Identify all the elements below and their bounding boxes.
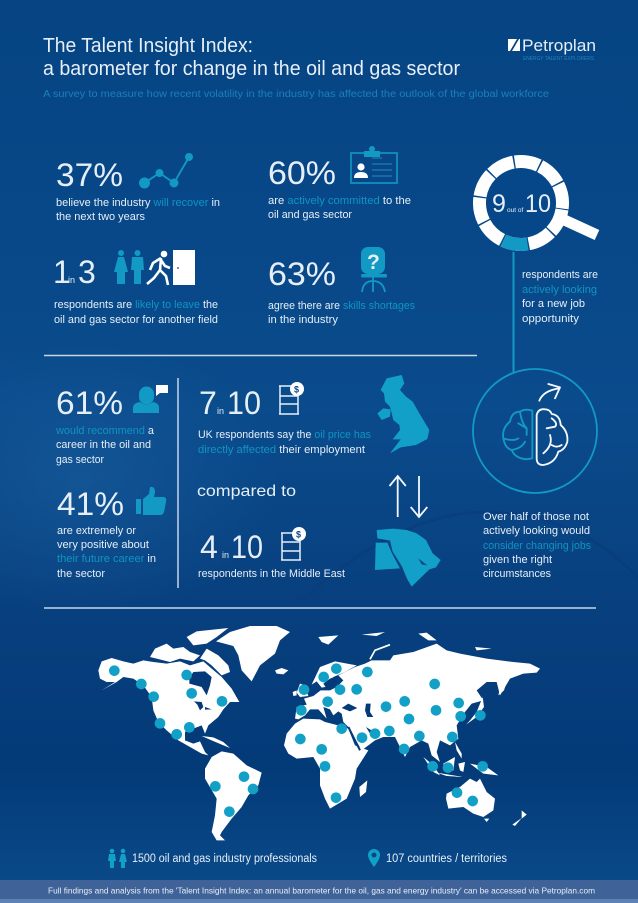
stat: 41% positive: the sector <box>57 568 105 580</box>
connector line <box>512 252 514 372</box>
icon: map pin <box>368 849 380 867</box>
world map <box>98 626 540 840</box>
stat: 37% recover: 37% <box>56 157 123 193</box>
text: consider changing jobs: Over half of those not <box>483 511 589 523</box>
text: actively looking: actively looking <box>522 284 597 296</box>
stat: 4 in 10 Middle East: 10 <box>231 529 263 565</box>
text: consider changing jobs: circumstances <box>483 568 551 580</box>
text: professionals: 1500 oil and gas industry professionals <box>132 853 317 865</box>
icon: brain <box>503 384 567 465</box>
Americas and Greenland <box>98 626 290 840</box>
stat: 4 in 10 Middle East: respondents in the Middle East <box>198 568 345 580</box>
icon: people <box>108 849 127 868</box>
footer band <box>0 880 638 903</box>
stat: 4 in 10 Middle East: in <box>222 550 229 560</box>
logo: Petroplan <box>508 37 596 62</box>
stat: 1 in 3 <box>53 254 218 326</box>
icon: people leaving through door <box>114 250 195 285</box>
stat: 7 in 10 UK: 10 <box>227 385 261 421</box>
location dots <box>109 663 488 817</box>
icon: oil barrel with dollar: $ <box>294 384 299 394</box>
stat: 37% recover: the next two years <box>56 211 145 223</box>
stat: 1 in 3: 3 <box>78 254 96 290</box>
icon: line chart <box>140 154 192 188</box>
stat: 60% committed <box>268 155 411 221</box>
icon: magnifier 9 out of 10: 9 <box>492 190 506 218</box>
stat: 41% positive: 41% <box>57 486 124 522</box>
compared to: compared to <box>197 483 296 500</box>
stat: 4 in 10 Middle East: 4 <box>200 529 218 565</box>
stat: 60% committed: 60% <box>268 155 336 191</box>
stat: 63% skills shortages: in the industry <box>268 314 339 326</box>
footer band: Full findings and analysis from the 'Talent Insight Index: an annual barometer for the oil, gas and energy industry' can be accessed via Petroplan.com <box>48 886 595 896</box>
stat: 63% skills shortages: 63% <box>268 256 336 292</box>
stat: 60% committed: oil and gas sector <box>268 209 352 221</box>
logo: Petroplan: Petroplan <box>522 37 596 55</box>
stat: 41% positive <box>57 486 156 580</box>
stat: 37% recover: believe the industry will recover in <box>56 197 220 209</box>
stat: 7 in 10 UK: in <box>217 406 224 416</box>
map: Middle East <box>375 529 441 587</box>
stat: 41% positive: are extremely or <box>57 525 136 537</box>
text: countries: 107 countries / territories <box>386 853 507 865</box>
stat: 4 in 10 Middle East <box>198 529 345 580</box>
icon: oil barrel with dollar <box>279 382 304 414</box>
stat: 1 in 3: oil and gas sector for another field <box>54 314 218 326</box>
icon: speaking person <box>133 385 168 413</box>
text: actively looking: respondents are <box>522 269 598 281</box>
icon: magnifier 9 out of 10: 10 <box>525 190 551 218</box>
arrows: up and down <box>390 476 427 517</box>
Europe, Asia, Africa, Australia <box>284 632 540 826</box>
stat: 61% recommend: would recommend a <box>55 425 155 437</box>
text: consider changing jobs: consider changing jobs <box>483 540 591 552</box>
stat: 60% committed: are actively committed to the <box>268 195 411 207</box>
subtitle: A survey to measure how recent volatility in the industry has affected the outlook of the global workforce <box>43 88 549 100</box>
stat: 61% recommend: gas sector <box>56 454 104 466</box>
stat: 41% positive: their future career in <box>57 553 156 565</box>
logo: Petroplan: ENERGY TALENT EXPLORERS <box>523 56 595 62</box>
text: actively looking: for a new job <box>522 298 585 310</box>
title: a barometer for change in the oil and gas sector <box>43 58 460 80</box>
stat: 61% recommend: 61% <box>56 385 123 421</box>
stat: 7 in 10 UK: directly affected their employment <box>198 444 365 456</box>
stat: 7 in 10 UK: UK respondents say the oil price has <box>198 429 371 441</box>
icon: oil barrel with dollar <box>281 527 306 560</box>
text: actively looking <box>522 269 598 325</box>
stat: 61% recommend: career in the oil and <box>56 439 151 451</box>
icon: oil barrel with dollar: $ <box>296 530 301 540</box>
stat: 1 in 3: 1 <box>53 254 71 290</box>
icon: empty chair with question mark: ? <box>367 251 380 274</box>
title: The Talent Insight Index: <box>43 35 253 57</box>
stat: 37% recover <box>56 157 220 223</box>
text: actively looking: opportunity <box>522 313 580 325</box>
stat: 63% skills shortages <box>268 256 415 326</box>
stat: 1 in 3: in <box>68 275 75 285</box>
icon: thumbs up <box>136 487 166 515</box>
icon: empty chair with question mark <box>361 247 387 292</box>
map: UK <box>377 375 429 453</box>
title <box>43 35 460 80</box>
text: consider changing jobs: given the right <box>483 554 552 566</box>
icon: clipboard <box>351 146 397 183</box>
icon: magnifier 9 out of 10: out of <box>507 207 523 214</box>
stat: 61% recommend <box>55 385 155 466</box>
panel: brain circle <box>473 369 597 493</box>
text: consider changing jobs <box>483 511 591 580</box>
stat: 63% skills shortages: agree there are skills shortages <box>268 300 415 312</box>
stat: 7 in 10 UK <box>198 385 371 456</box>
text: consider changing jobs: actively looking would <box>483 525 590 537</box>
icon: magnifier 9 out of 10 <box>473 155 597 251</box>
stat: 41% positive: very positive about <box>57 539 149 551</box>
stat: 1 in 3: respondents are likely to leave the <box>54 299 218 311</box>
stat: 7 in 10 UK: 7 <box>199 385 217 421</box>
